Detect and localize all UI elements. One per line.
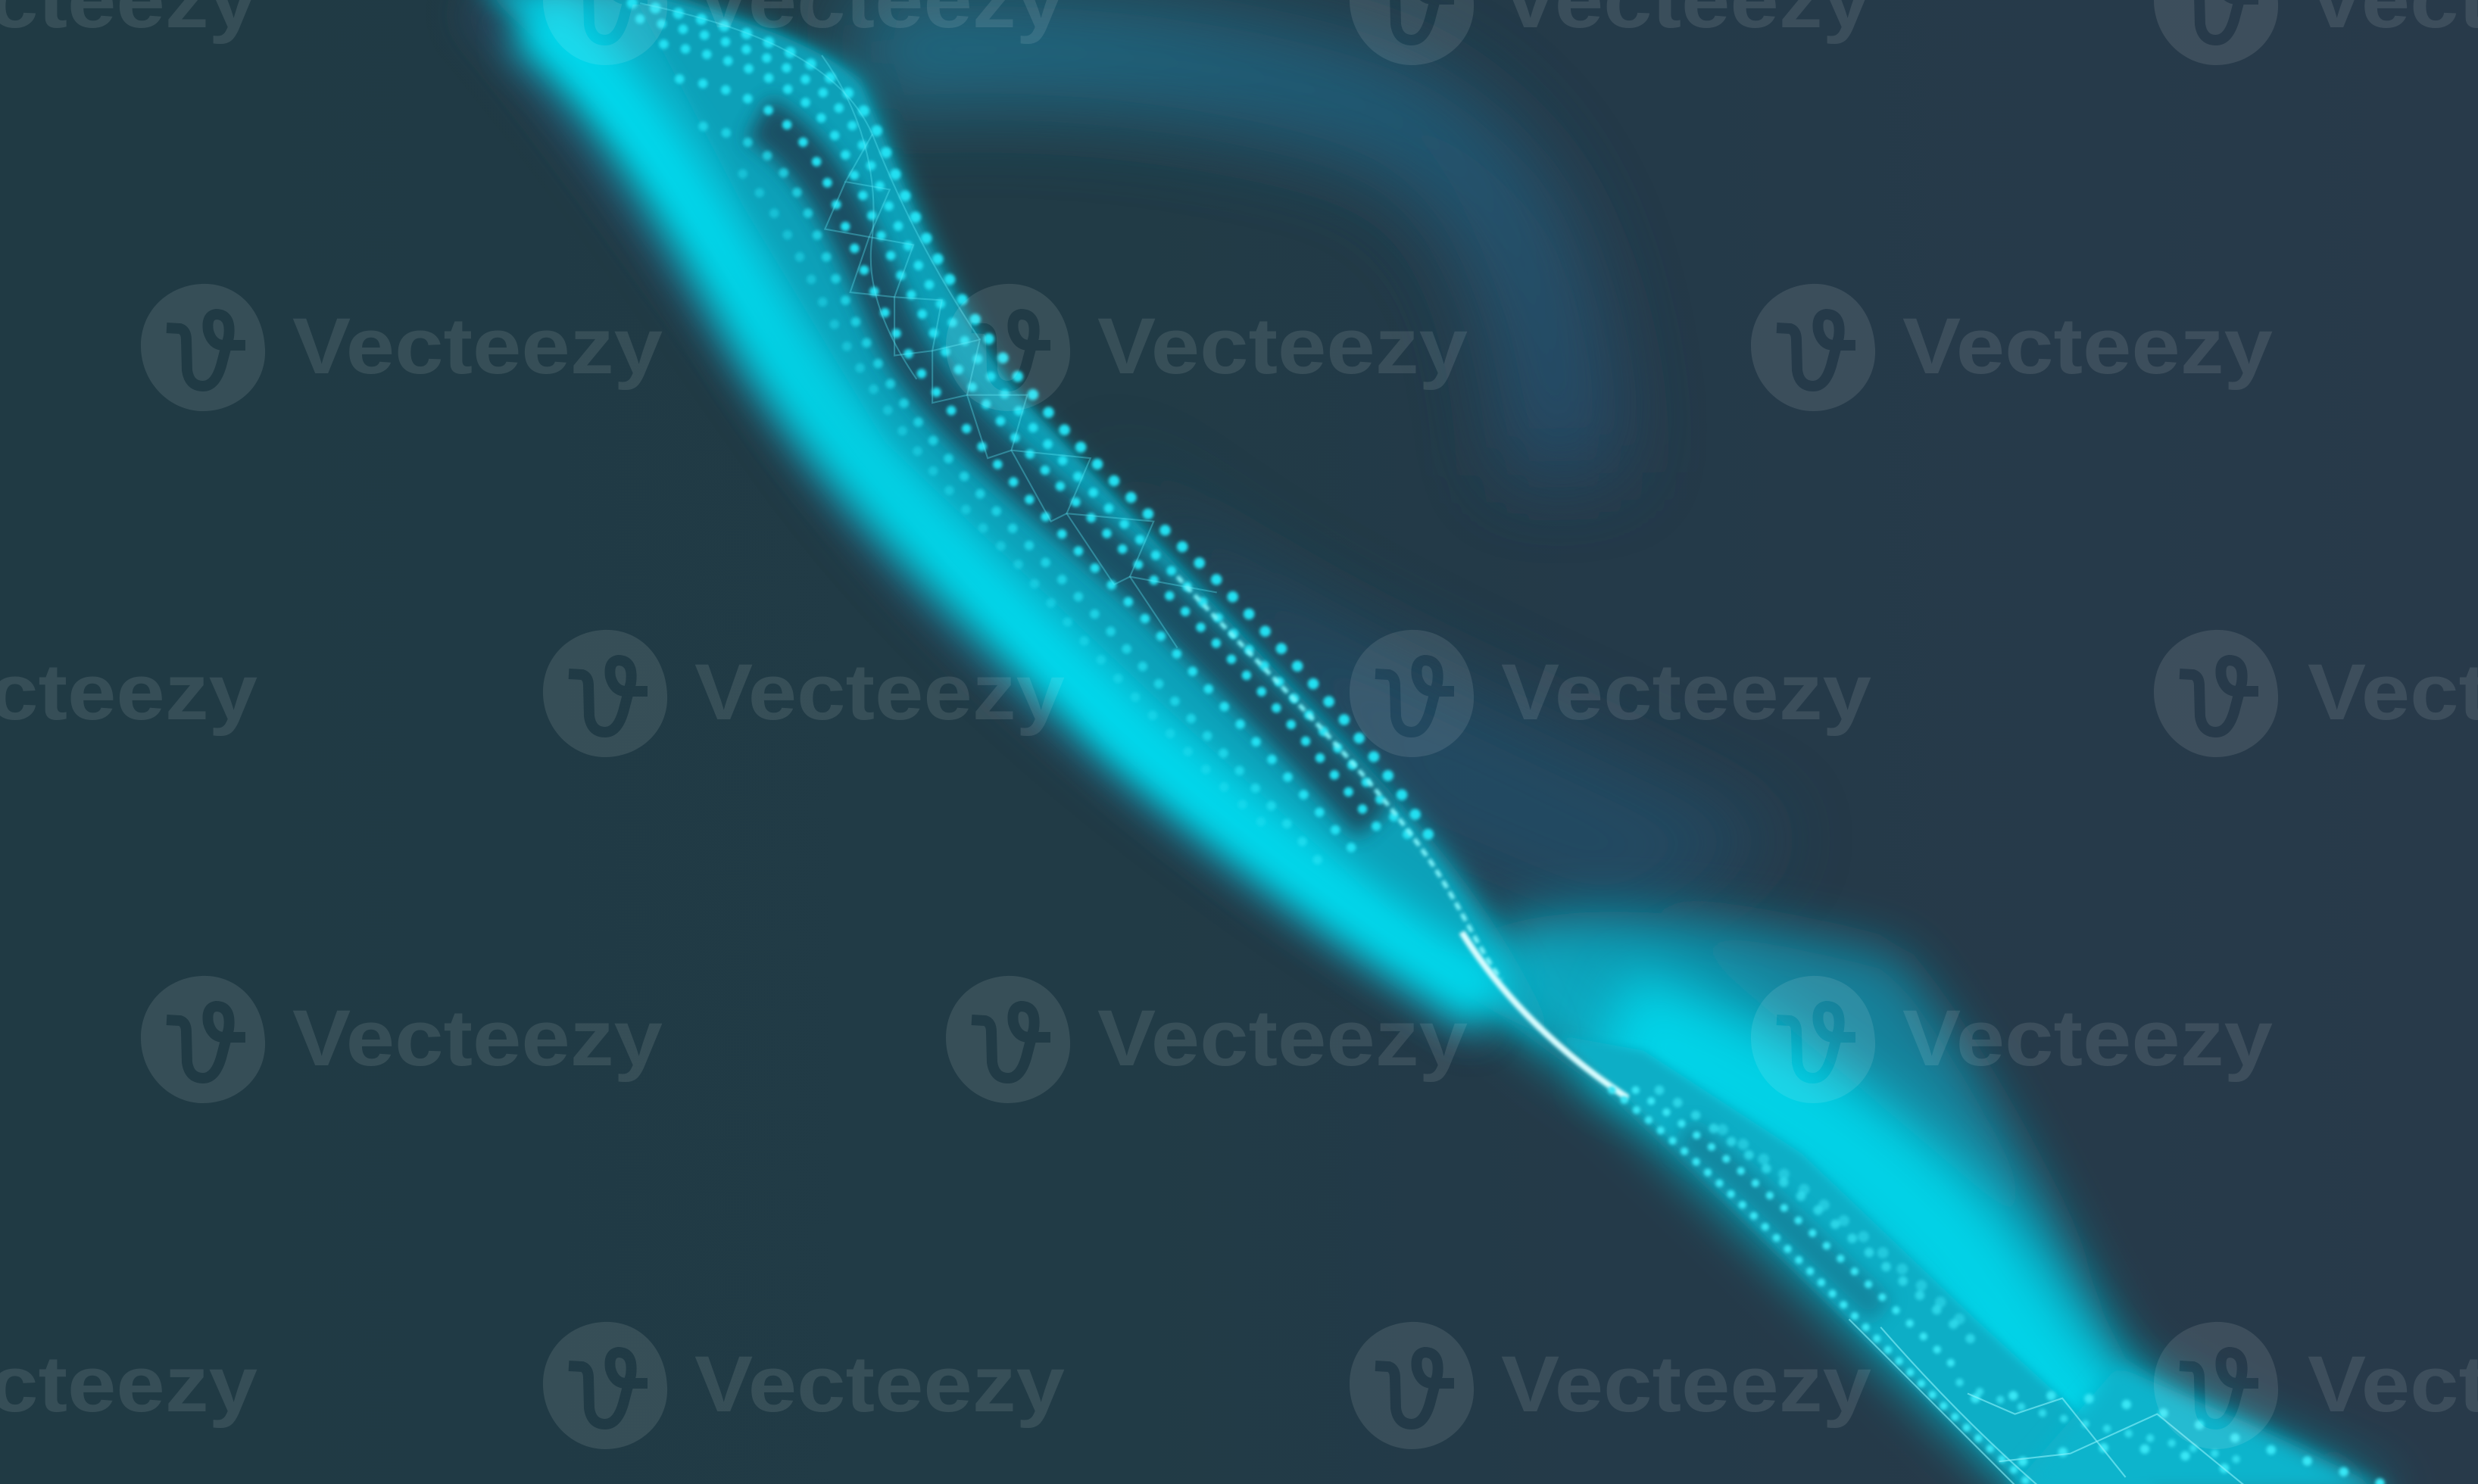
watermark — [1350, 1322, 1871, 1449]
lower mesh dark channel — [1683, 1134, 1880, 1311]
lower plume — [1485, 912, 2402, 1484]
faint upper arc plume — [854, 49, 1565, 474]
ribbon bright core — [529, 16, 1493, 1003]
watermark — [946, 284, 1468, 411]
lower plume bright core — [1612, 1027, 2118, 1461]
watermark row 4 — [141, 976, 2273, 1103]
watermark — [1751, 284, 2273, 411]
watermark — [1350, 0, 1871, 65]
watermark — [543, 0, 1065, 65]
watermark — [946, 976, 1468, 1103]
upper mesh body — [632, 0, 1493, 964]
watermark: Vecteezy — [292, 302, 663, 391]
central bright strand — [1462, 932, 1628, 1098]
watermark: Vecteezy — [1501, 1340, 1871, 1429]
watermark — [1751, 976, 2273, 1103]
watermark — [543, 630, 1065, 757]
lower mesh lines — [1849, 1319, 2244, 1484]
watermark row 1 — [0, 0, 2478, 65]
watermark: Vecteezy — [292, 994, 663, 1083]
watermark — [2154, 0, 2478, 65]
watermark: Vecteezy — [1902, 994, 2273, 1083]
mesh lines upper — [640, 3, 1217, 648]
watermark row 3 — [0, 630, 2478, 757]
dark mesh channel — [759, 119, 1375, 822]
watermark: Vecteezy — [1097, 994, 1468, 1083]
bright mesh edge — [1178, 577, 1501, 980]
watermark: Vecteezy — [694, 648, 1065, 737]
particle wave — [474, 0, 2402, 1484]
watermark — [1350, 630, 1871, 757]
watermark — [2154, 630, 2478, 757]
watermark row 2 — [141, 284, 2273, 411]
blurred mesh dots upper — [632, 3, 1435, 872]
watermark — [141, 284, 663, 411]
watermark — [2154, 1322, 2478, 1449]
lower mesh — [1612, 1090, 2386, 1484]
main ribbon body — [474, 0, 1556, 1043]
haze behind the ribbon — [1091, 442, 1786, 948]
watermark: Vecteezy — [1902, 302, 2273, 391]
watermark: Vecteezy — [694, 1340, 1065, 1429]
watermark row 5 — [0, 1322, 2478, 1449]
lower mesh body — [1556, 1035, 2165, 1484]
blue halo along lower-left edge — [474, 0, 1485, 1027]
watermark: Vecteezy — [1097, 302, 1468, 391]
bottom-right mesh glow — [2007, 1367, 2394, 1484]
watermark — [543, 1322, 1065, 1449]
watermark: Vecteezy — [1501, 648, 1871, 737]
watermark — [141, 976, 663, 1103]
